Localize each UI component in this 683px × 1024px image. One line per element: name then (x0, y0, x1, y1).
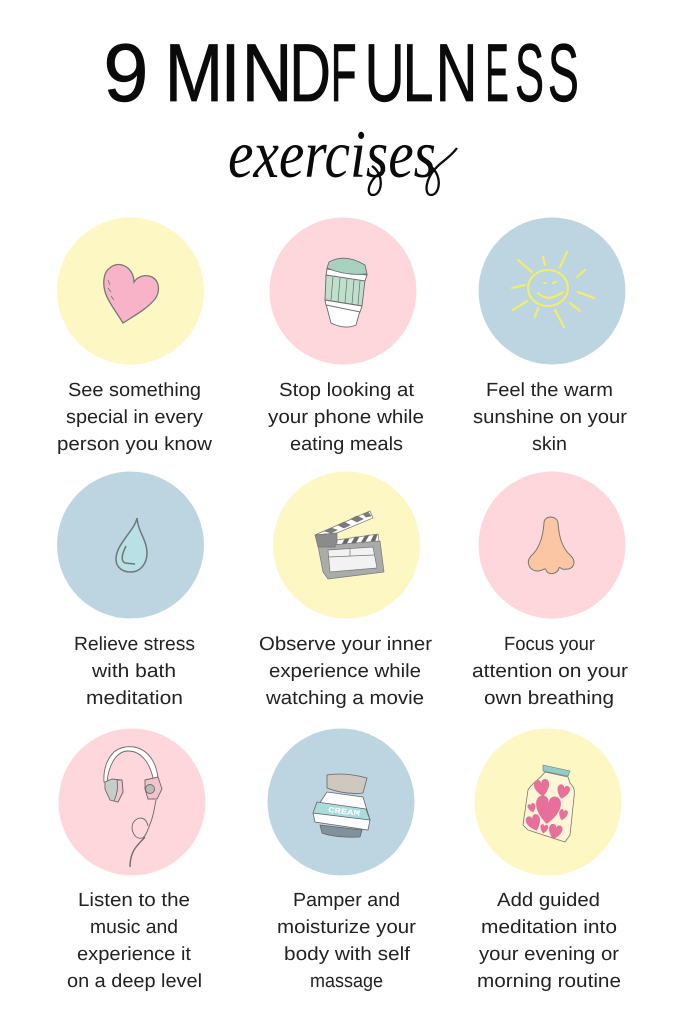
title: 9 MINDFULNESS: I (220, 28, 240, 119)
title: 9 MINDFULNESS: S (548, 28, 579, 119)
caption: meditation (86, 688, 183, 709)
panel: bath exercise (57, 472, 204, 709)
title: 9 MINDFULNESS: E (485, 28, 509, 119)
caption: meditation into (481, 917, 617, 938)
title: 9 MINDFULNESS: M (165, 28, 223, 119)
title: 9 MINDFULNESS: N (436, 28, 478, 119)
caption: on a deep level (67, 971, 202, 992)
caption: moisturize your (277, 917, 417, 938)
panel: nose exercise (472, 472, 629, 709)
caption: Pamper and (293, 890, 400, 911)
caption: music and (90, 917, 178, 938)
panel: movie exercise (259, 472, 433, 709)
icon: headphones (104, 747, 162, 867)
title: 9 MINDFULNESS: L (403, 28, 434, 119)
caption (259, 634, 433, 709)
caption (57, 380, 212, 455)
title: 9 MINDFULNESS: D (289, 28, 331, 119)
caption: experience while (269, 661, 421, 682)
caption (473, 380, 628, 455)
caption (67, 890, 202, 992)
caption: own breathing (484, 688, 614, 709)
icon: clapperboard (315, 511, 384, 579)
panel: sun exercise (473, 218, 628, 455)
title: 9 MINDFULNESS (103, 28, 579, 119)
panel: cup exercise (268, 218, 424, 455)
panel: music exercise (58, 728, 206, 992)
caption (268, 380, 424, 455)
caption: watching a movie (265, 688, 424, 709)
panel: heart exercise (57, 218, 212, 455)
caption (472, 634, 629, 709)
icon: nose (528, 517, 574, 574)
caption: your evening or (479, 944, 620, 965)
caption: eating meals (290, 434, 403, 455)
caption: Feel the warm (486, 380, 613, 401)
caption: massage (310, 971, 383, 992)
caption: experience it (77, 944, 192, 965)
icon: water drop (116, 518, 147, 572)
caption: person you know (57, 434, 212, 455)
caption (477, 890, 621, 992)
icon: sun (512, 252, 594, 327)
icon: heart (104, 265, 158, 323)
icon: cream jar (313, 774, 370, 837)
label: CREAM: CREAM (328, 806, 361, 819)
icon: coffee cup (325, 258, 367, 327)
caption (74, 634, 195, 709)
caption: Observe your inner (259, 634, 433, 655)
caption (277, 890, 417, 992)
caption: special in every (66, 407, 204, 428)
panel: jar of hearts exercise (474, 728, 622, 992)
caption: sunshine on your (473, 407, 628, 428)
caption: Focus your (504, 634, 596, 655)
caption: Stop looking at (279, 380, 415, 401)
title: 9 MINDFULNESS: N (242, 28, 292, 119)
caption: attention on your (472, 661, 629, 682)
caption: your phone while (268, 407, 424, 428)
title: 9 MINDFULNESS: U (365, 28, 405, 119)
caption: See something (68, 380, 201, 401)
caption: Relieve stress (74, 634, 195, 655)
caption: morning routine (477, 971, 621, 992)
panel: cream exercise (268, 728, 417, 992)
caption: Listen to the (78, 890, 190, 911)
caption: with bath (91, 661, 176, 682)
caption: skin (532, 434, 567, 455)
caption: Add guided (497, 890, 600, 911)
subtitle: exercises: exercises (228, 116, 436, 192)
title: 9 MINDFULNESS: F (331, 28, 357, 119)
title: 9 MINDFULNESS: 9 (103, 28, 148, 119)
title: 9 MINDFULNESS: S (515, 28, 544, 119)
caption: body with self (284, 944, 411, 965)
icon: jar of hearts (523, 765, 574, 842)
